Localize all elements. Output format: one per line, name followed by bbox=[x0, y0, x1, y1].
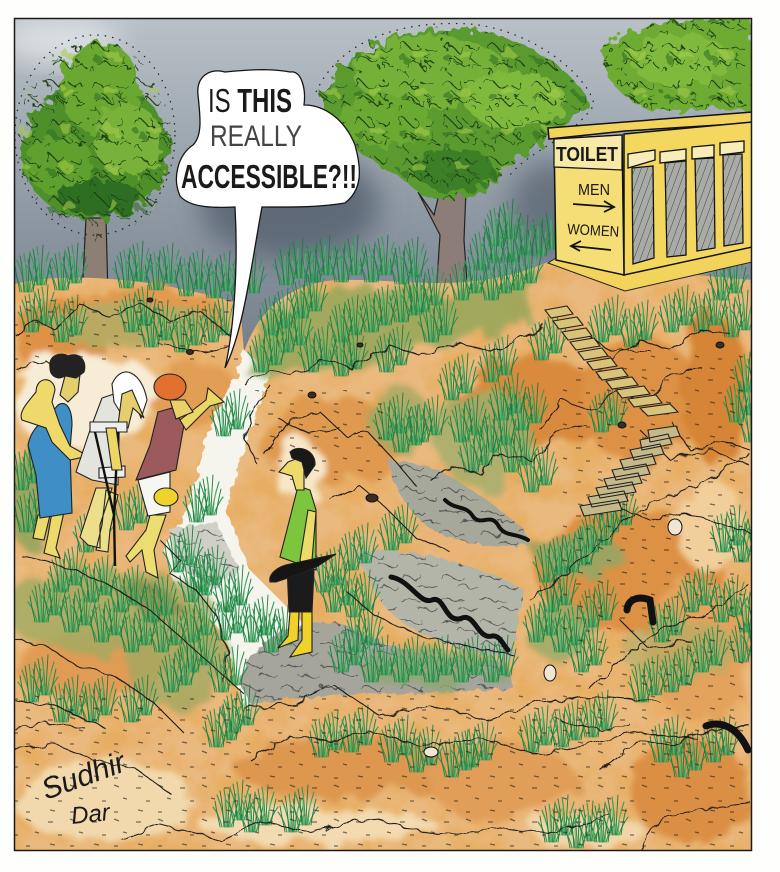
young man in green shirt with umbrella bbox=[270, 448, 336, 657]
arrow: men, right bbox=[573, 201, 614, 212]
yellow boots bbox=[278, 612, 312, 657]
stone stairs bbox=[545, 306, 680, 516]
arm bbox=[106, 428, 122, 470]
crutches bbox=[90, 422, 127, 478]
denser second layer of grass bbox=[21, 199, 778, 841]
ground base bbox=[15, 262, 752, 850]
burrow holes bbox=[147, 298, 724, 757]
snake emerging from burrow, middle right bbox=[627, 598, 653, 622]
stormy sky bbox=[0, 18, 752, 364]
sign: women: WOMEN bbox=[567, 221, 620, 241]
top-right tree canopy bbox=[604, 18, 752, 110]
tree trunk bbox=[418, 192, 468, 283]
blue sari bbox=[28, 404, 72, 518]
arrow: women, left bbox=[571, 241, 611, 251]
woman carrying a baby bbox=[21, 354, 88, 558]
arm pointing to the toilet bbox=[180, 388, 224, 430]
bubble text: REALLY: REALLY bbox=[210, 120, 302, 153]
bubble text: ACCESSIBLE?!!: ACCESSIBLE?!! bbox=[181, 158, 357, 195]
man in orange turban pointing bbox=[126, 374, 224, 578]
canopy dots bbox=[316, 24, 594, 175]
head bbox=[118, 390, 144, 428]
front wall bbox=[554, 135, 624, 275]
snake emerging from burrow, lower right bbox=[706, 724, 748, 750]
speech bubble bbox=[176, 70, 359, 368]
baby bbox=[21, 380, 88, 460]
lower snake in water bbox=[391, 577, 508, 650]
soil speckle marks bbox=[15, 300, 750, 850]
bubble text: IS THIS: IS THIS bbox=[208, 82, 292, 119]
upper grey water channel bbox=[388, 461, 530, 546]
middle grey water channel bbox=[355, 550, 525, 660]
sign panel bbox=[554, 135, 622, 170]
hair with bun bbox=[50, 354, 85, 378]
legs bbox=[126, 515, 166, 578]
white hair bbox=[112, 372, 147, 418]
green shirt bbox=[280, 486, 316, 570]
left grey water bbox=[170, 520, 240, 590]
tree canopy bbox=[322, 29, 588, 200]
sign heading: toilet: TOILET bbox=[556, 144, 618, 166]
ridge contour lines bbox=[15, 303, 750, 850]
black umbrella bbox=[270, 554, 336, 582]
canopy dots bbox=[15, 35, 175, 235]
tree trunk bbox=[82, 217, 108, 279]
legs bbox=[80, 488, 118, 552]
white dhoti bbox=[138, 472, 170, 516]
artist signature: Sudhir bbox=[37, 746, 131, 807]
yellow pot bbox=[154, 488, 178, 506]
maroon shirt bbox=[136, 408, 184, 480]
orange turban bbox=[154, 374, 186, 400]
grass tufts bbox=[8, 206, 765, 848]
legs bbox=[33, 512, 64, 558]
arm bbox=[300, 510, 316, 568]
snakes bbox=[391, 500, 748, 750]
doors bbox=[628, 141, 744, 264]
white stream and grey water bbox=[166, 350, 530, 705]
orange and sand soil patches bbox=[13, 287, 752, 850]
head bbox=[170, 400, 193, 419]
head bbox=[60, 372, 80, 402]
bubble outline with tail bbox=[176, 70, 359, 368]
centre tree bbox=[316, 24, 594, 296]
upper snake in water bbox=[445, 500, 528, 540]
white shirt bbox=[76, 392, 120, 485]
pale stream bed bbox=[164, 348, 302, 706]
olive wash under the grass bbox=[5, 270, 740, 708]
sign: men: MEN bbox=[578, 182, 610, 199]
head and neck bbox=[279, 456, 304, 490]
side wall bbox=[624, 122, 752, 275]
lower grey water pool bbox=[240, 623, 515, 705]
old man on crutches bbox=[76, 372, 147, 566]
signature surname: Dar bbox=[70, 799, 112, 830]
left tree bbox=[15, 35, 175, 298]
toilet block bbox=[548, 112, 752, 291]
black trousers bbox=[287, 565, 314, 612]
roof bbox=[548, 112, 752, 139]
water ripples bbox=[170, 461, 530, 705]
tree canopy bbox=[19, 42, 171, 238]
yellow base slab bbox=[548, 246, 752, 291]
